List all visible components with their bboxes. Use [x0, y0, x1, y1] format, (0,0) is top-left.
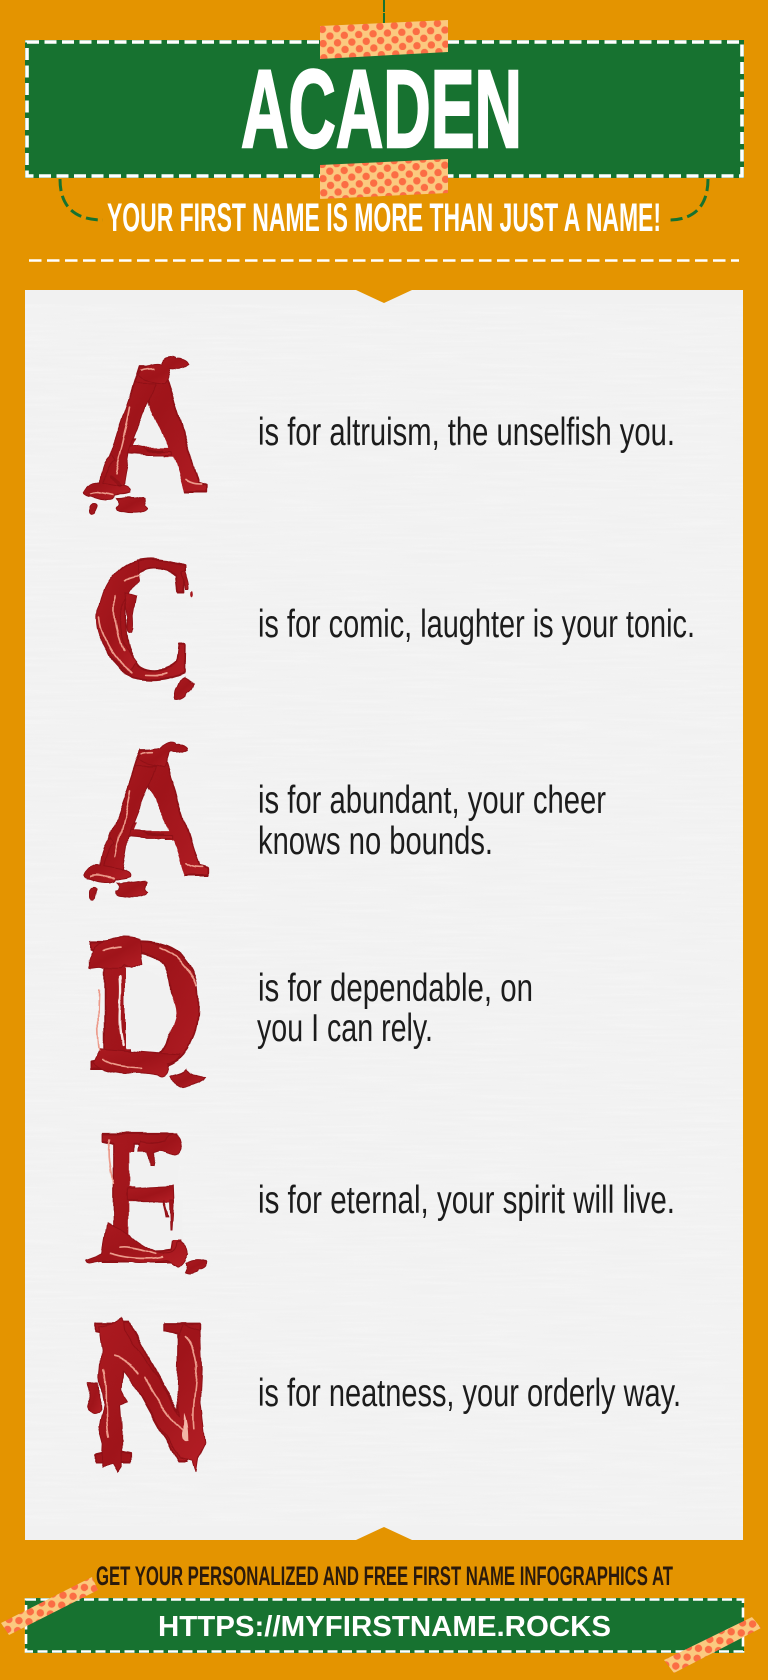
thread: top — [383, 0, 385, 24]
panel: letters — [25, 290, 743, 1540]
header banner — [25, 40, 744, 178]
letter A (second): A — [94, 707, 208, 917]
text: A second: knows no bounds. — [258, 820, 493, 863]
footer url: HTTPS://MYFIRSTNAME.ROCKS — [158, 1611, 611, 1643]
divider — [29, 259, 739, 262]
letter C: C — [96, 518, 196, 717]
letter A (first): A — [94, 324, 208, 534]
letter E: E — [100, 1089, 188, 1305]
text: D — [257, 967, 533, 1050]
text: D: you I can rely. — [257, 1007, 433, 1050]
text: D: is for dependable, on — [258, 967, 533, 1010]
tape: footer left — [1, 1577, 98, 1635]
text: A second: is for abundant, your cheer — [258, 779, 606, 822]
letter N: N — [92, 1273, 202, 1508]
title: ACADEN — [241, 48, 522, 171]
text: A second — [258, 779, 606, 863]
connector: left — [60, 179, 103, 220]
connector: right — [669, 179, 708, 220]
tape: footer right — [664, 1617, 761, 1673]
letter D: D — [88, 896, 206, 1112]
footer banner — [25, 1598, 744, 1653]
tape: top — [320, 20, 448, 59]
tape: bottom — [320, 159, 448, 199]
